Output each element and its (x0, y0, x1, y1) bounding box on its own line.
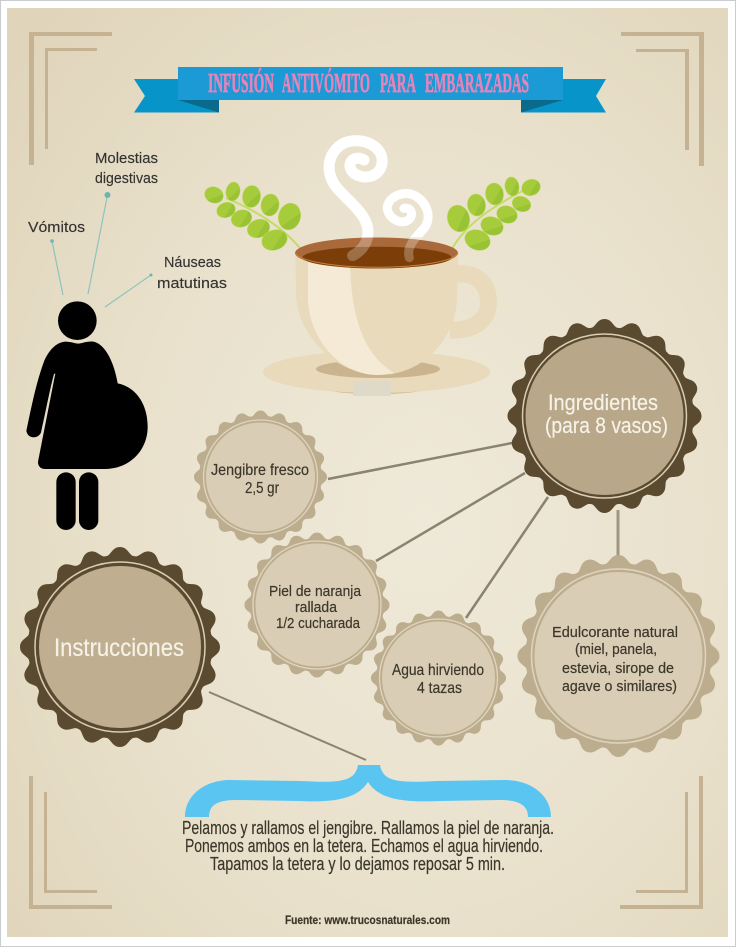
badge: Edulcorante natural: Edulcorante natural (552, 624, 678, 641)
title: PARA (380, 68, 416, 98)
title: ANTIVÓMITO (282, 68, 370, 98)
badge: Piel de naranja: 1/2 cucharada (276, 615, 361, 632)
connector lines (209, 443, 618, 760)
symptom labels with pointers: digestivas (95, 170, 158, 187)
instructions text: Tapamos la tetera y lo dejamos reposar 5 min. (210, 854, 505, 874)
title ribbon: EMBARAZADAS (425, 68, 529, 98)
badge: Agua hirviendo: Agua hirviendo (392, 662, 484, 679)
title ribbon (134, 67, 606, 112)
icon: coffee cup on saucer (263, 238, 490, 396)
badge: Jengibre fresco: Jengibre fresco (211, 462, 309, 479)
corner ornament: bottom left (29, 776, 112, 909)
instructions text: Pelamos y rallamos el jengibre. Rallamos la piel de naranja. (182, 818, 554, 838)
badge: Instrucciones (20, 547, 220, 747)
corner ornament: top left (29, 32, 112, 165)
corner ornament: top right (621, 32, 704, 166)
title: INFUSIÓN (208, 68, 274, 98)
symptom labels with pointers: matutinas (157, 275, 227, 292)
title (208, 68, 529, 98)
badge: Jengibre fresco: 2,5 gr (245, 480, 280, 497)
badge: Agua hirviendo (371, 610, 506, 746)
badge: Jengibre fresco (194, 410, 327, 544)
curly brace (185, 765, 551, 817)
corner ornament: bottom right (620, 776, 703, 909)
badge: Edulcorante natural: agave o similares) (562, 678, 677, 695)
source credit: Fuente: www.trucosnaturales.com (285, 913, 450, 927)
badge: Ingredientes: (para 8 vasos) (545, 413, 668, 438)
badge: Instrucciones: Instrucciones (54, 634, 184, 662)
symptom labels with pointers: Náuseas (164, 254, 221, 271)
badge: Piel de naranja: Piel de naranja (269, 583, 362, 600)
badge: Ingredientes: Ingredientes (548, 390, 658, 415)
badge: Ingredientes (508, 319, 702, 513)
instructions text: Ponemos ambos en la tetera. Echamos el agua hirviendo. (185, 836, 543, 856)
badge: Piel de naranja: rallada (295, 599, 338, 616)
badge: Piel de naranja (244, 532, 390, 678)
symptom labels with pointers: Molestias (95, 150, 158, 167)
badge: Edulcorante natural (518, 555, 720, 757)
instructions text (182, 818, 554, 874)
symptom labels with pointers (28, 150, 227, 307)
icon: right herb sprig (444, 176, 543, 255)
symptom labels with pointers: Vómitos (28, 219, 85, 236)
icon: pregnant woman (26, 301, 148, 530)
icon: left herb sprig (202, 181, 304, 254)
badge: Agua hirviendo: 4 tazas (417, 680, 462, 697)
icon: steam swirls (329, 141, 428, 258)
badge: Edulcorante natural: (miel, panela, (575, 641, 657, 658)
badge: Edulcorante natural: estevia, sirope de (562, 660, 674, 677)
